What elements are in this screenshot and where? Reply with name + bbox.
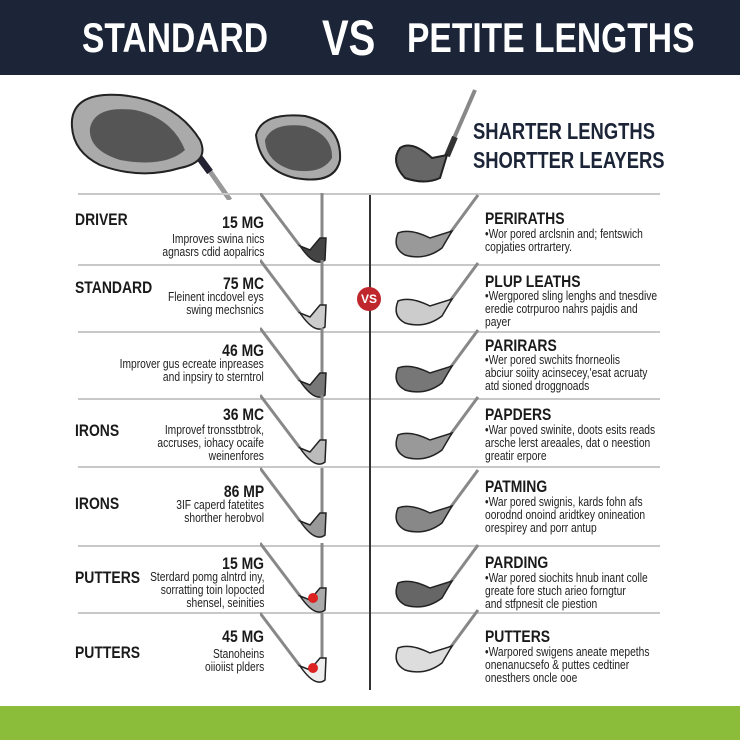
- text: 36 MC: [223, 405, 264, 424]
- icon: right club 4: [396, 397, 478, 459]
- text: arsche lerst areaales, dat o neestion: [485, 436, 650, 450]
- icon: petite club: [396, 90, 475, 182]
- text: greatir erpore: [485, 449, 547, 463]
- left row labels: DRIVER: [75, 210, 128, 229]
- text: 45 MG: [222, 627, 264, 646]
- text: Improvef tronsstbtrok,: [165, 423, 264, 437]
- top illustrations: [70, 89, 477, 200]
- text: PUTTERS: [485, 627, 550, 646]
- text: abciur soiity acinsecey,'esat acruaty: [485, 366, 647, 380]
- text: Improves swina nics: [172, 232, 264, 246]
- text: IRONS: [75, 494, 119, 513]
- text: 3IF caperd fatetites: [176, 498, 264, 512]
- text: atd sioned droggnoads: [485, 379, 589, 393]
- header bar: [0, 0, 740, 75]
- text: Stanoheins: [213, 647, 264, 661]
- text: 75 MC: [223, 274, 264, 293]
- icon: club 2: [260, 260, 326, 329]
- text: •War pored swignis, kards fohn afs: [485, 495, 643, 509]
- text: shensel, seinities: [186, 596, 264, 610]
- row dividers: [78, 193, 660, 194]
- text: onenanucsefo & puttes cedtiner: [485, 658, 629, 672]
- icon: right club 5: [396, 470, 478, 532]
- text: 15 MG: [222, 554, 264, 573]
- icon: right club 3: [396, 330, 478, 392]
- text: PAPDERS: [485, 405, 551, 424]
- text: sorratting toin lopocted: [160, 583, 264, 597]
- footer green bar: [0, 706, 740, 740]
- text: PARDING: [485, 553, 548, 572]
- title: vs: VS: [322, 10, 375, 66]
- text: payer: [485, 315, 511, 329]
- text: shorther herobvol: [184, 511, 264, 525]
- left clubs: [260, 193, 327, 683]
- text: orespirey and porr antup: [485, 521, 597, 535]
- text: eredie cotrpuroo nahrs pajdis and: [485, 302, 638, 316]
- text: PARIRARS: [485, 336, 557, 355]
- text: swing mechsnics: [187, 303, 264, 317]
- icon: fairway wood head: [256, 115, 340, 180]
- icon: right club 1: [396, 195, 478, 257]
- icon: large driver: [72, 95, 230, 200]
- subtitle: shorter lengths: [473, 118, 665, 173]
- text: IRONS: [75, 421, 119, 440]
- right texts: PERIRATHS: [485, 209, 565, 228]
- icon: right club 2: [396, 263, 478, 325]
- icon: right club 7: [396, 610, 478, 672]
- text: •War pored siochits hnub inant colle: [485, 571, 648, 585]
- text: STANDARD: [75, 278, 152, 297]
- icon: club 4: [260, 395, 326, 464]
- text: Fleinent incdovel eys: [168, 290, 264, 304]
- text: and stfpnesit cle piestion: [485, 597, 597, 611]
- text: agnasrs cdid aopalrics: [162, 245, 264, 259]
- vs badge: [357, 287, 381, 311]
- right clubs: [395, 194, 480, 673]
- text: greate fore stuch arieo forngtur: [485, 584, 626, 598]
- text: oiioiist plders: [205, 660, 264, 674]
- text: Sterdard pomg alntrd iny,: [150, 570, 264, 584]
- text: PATMING: [485, 477, 547, 496]
- text: •Warpored swigens aneate mepeths: [485, 645, 649, 659]
- subtitle: shorter lengths: SHARTER LENGTHS: [473, 118, 655, 144]
- text: onesthers oncle ooe: [485, 671, 577, 685]
- left values: 15 MG: [222, 213, 264, 232]
- text: weinenfores: [209, 449, 264, 463]
- text: 86 MP: [224, 482, 264, 501]
- subtitle: shorter lengths: SHORTTER LEAYERS: [473, 147, 665, 173]
- text: PUTTERS: [75, 568, 140, 587]
- text: oorodnd onoind aridtkey onineation: [485, 508, 645, 522]
- text: 46 MG: [222, 341, 264, 360]
- text: accruses, iohacy ocaife: [157, 436, 264, 450]
- title: standard: STANDARD: [82, 14, 268, 61]
- text: Improver gus ecreate inpreases: [120, 357, 264, 371]
- text: •Wer pored swchits fnorneolis: [485, 353, 620, 367]
- icon: club 6: [260, 543, 326, 612]
- text: and inpsiry to sterntrol: [163, 370, 264, 384]
- icon: club 3: [260, 328, 326, 397]
- title: petite lengths: PETITE LENGTHS: [407, 14, 694, 61]
- text: PUTTERS: [75, 643, 140, 662]
- vs badge: VS: [361, 292, 377, 306]
- icon: club 5: [260, 468, 326, 537]
- text: copjaties ortrartery.: [485, 240, 572, 254]
- icon: right club 6: [396, 545, 478, 607]
- text: PLUP LEATHS: [485, 272, 581, 291]
- icon: club 7: [260, 613, 326, 682]
- text: •War poved swinite, doots esits reads: [485, 423, 655, 437]
- icon: club 1: [260, 193, 326, 262]
- text: •Wergpored sling lenghs and tnesdive: [485, 289, 657, 303]
- center vertical divider: [369, 195, 371, 690]
- text: •Wor pored arclsnin and; fentswich: [485, 227, 643, 241]
